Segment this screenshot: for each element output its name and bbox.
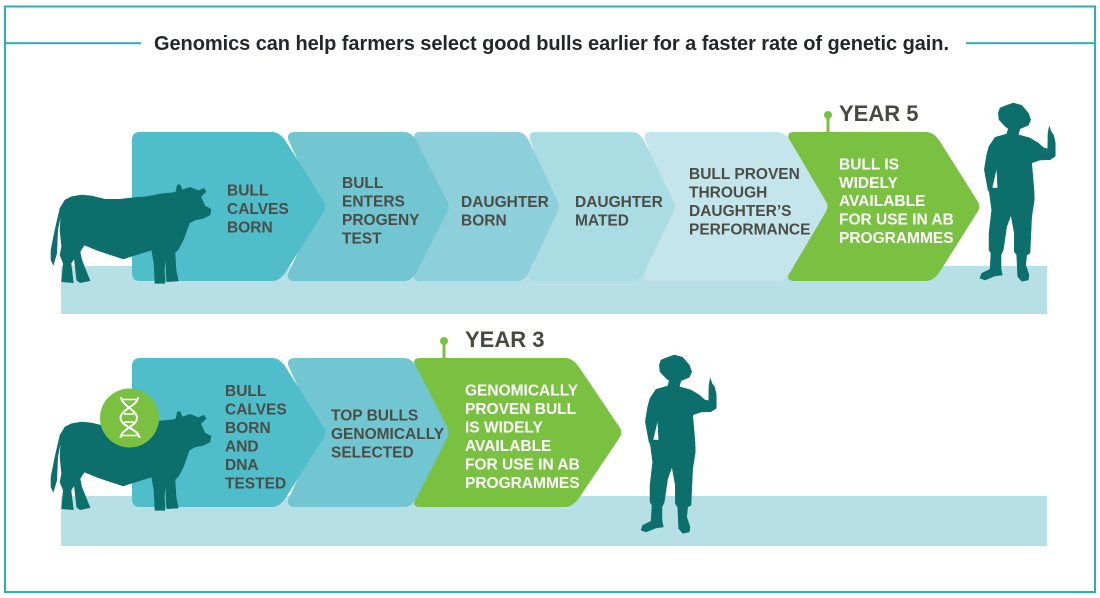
step: daughter born: DAUGHTER	[461, 194, 549, 211]
step: bull proven: PERFORMANCE	[689, 222, 810, 238]
title: Genomics can help farmers select good bulls earlier for a faster rate of genetic gain.	[154, 33, 949, 55]
step: bull proven: BULL PROVEN	[689, 166, 800, 183]
step: genomically proven bull: PROGRAMMES	[465, 475, 580, 492]
step: genomically proven bull: IS WIDELY	[465, 420, 543, 436]
step: bull proven: DAUGHTER’S	[689, 203, 791, 220]
step: top bulls genomically selected: TOP BULLS	[331, 408, 418, 424]
step: bull calves born and DNA tested: BULL	[225, 383, 266, 400]
step: bull calves born	[132, 132, 325, 281]
year marker: YEAR 5	[839, 101, 918, 126]
step: bull calves born: BULL	[227, 182, 268, 200]
ground band	[61, 496, 1047, 546]
panel: genomic pathway, year 3	[51, 327, 1047, 546]
step: bull enters progeny test	[288, 132, 449, 281]
step: top bulls genomically selected: SELECTED	[331, 444, 414, 462]
step: bull calves born and DNA tested: BORN	[225, 420, 271, 437]
icon: bull	[51, 412, 211, 510]
step: top bulls genomically selected	[288, 358, 449, 507]
step: bull enters progeny test: TEST	[342, 230, 382, 248]
year marker	[824, 101, 918, 133]
year marker: YEAR 3	[465, 327, 544, 352]
step: bull is widely available: WIDELY	[839, 175, 899, 192]
ground band	[61, 266, 1047, 314]
step: daughter born	[414, 132, 559, 281]
step: bull is widely available: FOR USE IN AB	[839, 212, 954, 228]
step: bull proven	[645, 132, 827, 281]
step: bull enters progeny test: PROGENY	[342, 212, 420, 229]
step: bull is widely available: AVAILABLE	[839, 193, 925, 210]
step: genomically proven bull: GENOMICALLY	[465, 382, 579, 400]
step: daughter mated: DAUGHTER	[575, 194, 663, 211]
panel: traditional pathway, year 5	[51, 101, 1055, 314]
icon: farmer	[980, 103, 1055, 281]
step: top bulls genomically selected: GENOMICALLY	[331, 426, 445, 443]
icon: farmer	[641, 355, 716, 533]
step: bull calves born and DNA tested: DNA	[225, 457, 259, 474]
step: bull calves born and DNA tested: TESTED	[225, 476, 286, 492]
step: bull calves born: BORN	[227, 220, 273, 236]
step: bull enters progeny test: ENTERS	[342, 194, 405, 210]
step: bull is widely available: PROGRAMMES	[839, 230, 954, 247]
year marker	[440, 327, 544, 359]
step: bull is widely available: BULL IS	[839, 156, 899, 174]
step: genomically proven bull	[414, 358, 621, 507]
step: daughter born: BORN	[461, 212, 507, 230]
step: genomically proven bull: PROVEN BULL	[465, 401, 576, 418]
step: bull is widely available	[788, 132, 979, 281]
step: genomically proven bull: FOR USE IN AB	[465, 456, 580, 474]
step: daughter mated: MATED	[575, 212, 629, 230]
step: genomically proven bull: AVAILABLE	[465, 438, 551, 455]
step: daughter mated	[530, 132, 675, 281]
title rule left	[5, 42, 141, 44]
title rule right	[966, 42, 1095, 44]
step: bull calves born: CALVES	[227, 201, 289, 218]
step: bull calves born and DNA tested: AND	[225, 438, 259, 456]
step: bull proven: THROUGH	[689, 184, 767, 202]
step: bull calves born and DNA tested	[132, 358, 325, 507]
icon: bull	[51, 185, 211, 283]
step: bull enters progeny test: BULL	[342, 175, 383, 192]
icon: DNA badge	[100, 388, 159, 448]
step: bull calves born and DNA tested: CALVES	[225, 402, 287, 418]
